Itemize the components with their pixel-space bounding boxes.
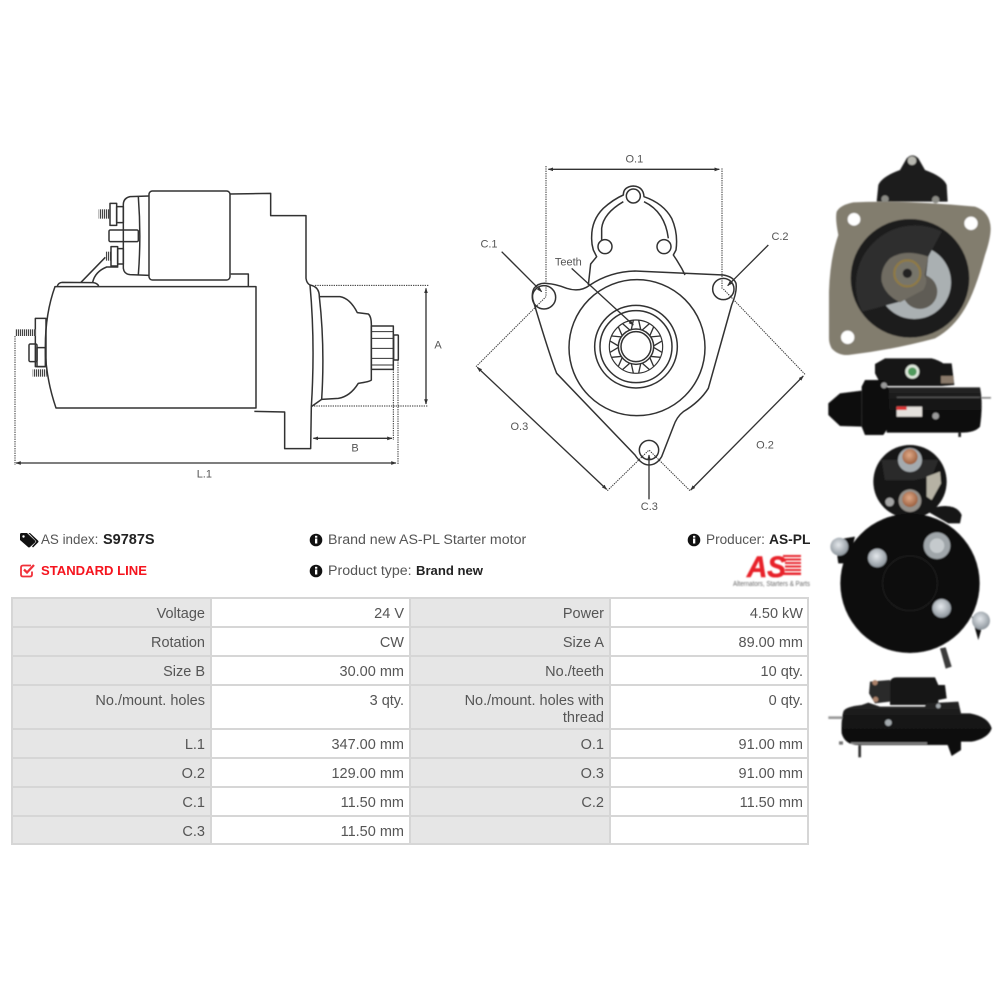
- dimension lines: [15, 285, 428, 465]
- dimension labels: O.2: [756, 439, 774, 451]
- drive housing: [230, 193, 398, 449]
- row: C.3: C.3: [182, 824, 205, 840]
- solenoid outline: [588, 186, 685, 285]
- row: rotation and size A: Size A: [563, 635, 604, 651]
- row: O.2 and O.3: [13, 759, 807, 786]
- row: rotation and size A: [13, 628, 807, 655]
- photo: side view, drive end right: [828, 677, 992, 757]
- pinion and concentric circles: [569, 280, 705, 416]
- row: L.1 and O.1: 347.00 mm: [331, 737, 404, 753]
- dimension labels: C.1: [480, 239, 498, 251]
- icon: checked box: [21, 565, 34, 576]
- row: O.2 and O.3: 129.00 mm: [331, 766, 404, 782]
- logo: AS: AS: [746, 551, 786, 584]
- text: standard line: STANDARD LINE: [41, 563, 147, 578]
- row: L.1 and O.1: O.1: [581, 737, 604, 753]
- dimension labels: A: [434, 339, 442, 351]
- text: producer: [706, 532, 810, 547]
- row: O.2 and O.3: 91.00 mm: [739, 766, 803, 782]
- logo: AS: Alternators, Starters & Parts: [733, 581, 810, 588]
- text: S9787S: [103, 532, 155, 548]
- photo: side view with solenoid on top: [828, 358, 991, 437]
- row: mounting holes: No./mount. holes with: [465, 693, 604, 709]
- solenoid: [81, 191, 230, 282]
- dimension lines: [476, 166, 805, 499]
- row: rotation and size A: 89.00 mm: [739, 635, 803, 651]
- dimension labels: [480, 153, 789, 513]
- row: voltage and power: Power: [563, 606, 604, 622]
- row: size B and teeth: 10 qty.: [761, 664, 803, 680]
- photo: drive end view: [829, 155, 991, 355]
- icon: tags: [20, 533, 38, 548]
- row: mounting holes: No./mount. holes: [95, 693, 205, 709]
- row: L.1 and O.1: [13, 730, 807, 757]
- photo: rear end view: [830, 445, 990, 669]
- dimension labels: O.3: [510, 421, 528, 433]
- row: rotation and size A: CW: [380, 635, 404, 651]
- text: AS index: [41, 532, 155, 548]
- row: size B and teeth: Size B: [163, 664, 205, 680]
- text: producer: Producer:: [706, 532, 765, 547]
- text: Brand new: [416, 563, 483, 578]
- row: mounting holes: [13, 686, 807, 728]
- row: mounting holes: thread: [563, 710, 604, 726]
- text: product type: Product type:: [328, 563, 412, 579]
- diagram: front view of starter: [476, 153, 805, 513]
- row: mounting holes: 0 qty.: [769, 693, 803, 709]
- row: size B and teeth: 30.00 mm: [340, 664, 404, 680]
- row: C.1 and C.2: C.1: [182, 795, 205, 811]
- row: C.3: 11.50 mm: [341, 824, 404, 840]
- row: voltage and power: [13, 599, 807, 626]
- table: specifications: [11, 597, 809, 845]
- row: size B and teeth: [13, 657, 807, 684]
- text: AS index: AS index:: [41, 532, 98, 547]
- row: voltage and power: 24 V: [374, 606, 404, 622]
- row: L.1 and O.1: L.1: [185, 737, 205, 753]
- row: rotation and size A: Rotation: [151, 635, 205, 651]
- dimension labels: Teeth: [555, 256, 582, 268]
- row: L.1 and O.1: 91.00 mm: [739, 737, 803, 753]
- motor body: [15, 282, 256, 408]
- row: C.1 and C.2: [13, 788, 807, 815]
- dimension labels: L.1: [197, 469, 212, 481]
- row: voltage and power: Voltage: [157, 606, 205, 622]
- row: size B and teeth: No./teeth: [545, 664, 604, 680]
- row: C.1 and C.2: 11.50 mm: [740, 795, 803, 811]
- row: O.2 and O.3: O.3: [581, 766, 604, 782]
- row: C.1 and C.2: 11.50 mm: [341, 795, 404, 811]
- mounting flange: [532, 271, 736, 465]
- row: voltage and power: 4.50 kW: [750, 606, 803, 622]
- icon: info brand: [310, 534, 322, 546]
- logo: AS: [733, 551, 810, 588]
- dimension labels: [197, 339, 442, 481]
- text: AS-PL: [769, 532, 810, 547]
- row: O.2 and O.3: O.2: [182, 766, 205, 782]
- dimension labels: B: [351, 443, 359, 455]
- icon: info producer: [688, 534, 700, 546]
- row: C.3: [13, 817, 807, 843]
- row: C.1 and C.2: C.2: [581, 795, 604, 811]
- diagram: side view of starter: [15, 191, 442, 481]
- row: mounting holes: 3 qty.: [370, 693, 404, 709]
- icon: info product type: [310, 565, 322, 577]
- dimension labels: C.3: [641, 501, 658, 513]
- text: product type: [328, 563, 483, 579]
- dimension labels: O.1: [625, 153, 643, 165]
- text: brand new description: Brand new AS-PL Starter motor: [328, 532, 526, 548]
- dimension labels: C.2: [771, 231, 789, 243]
